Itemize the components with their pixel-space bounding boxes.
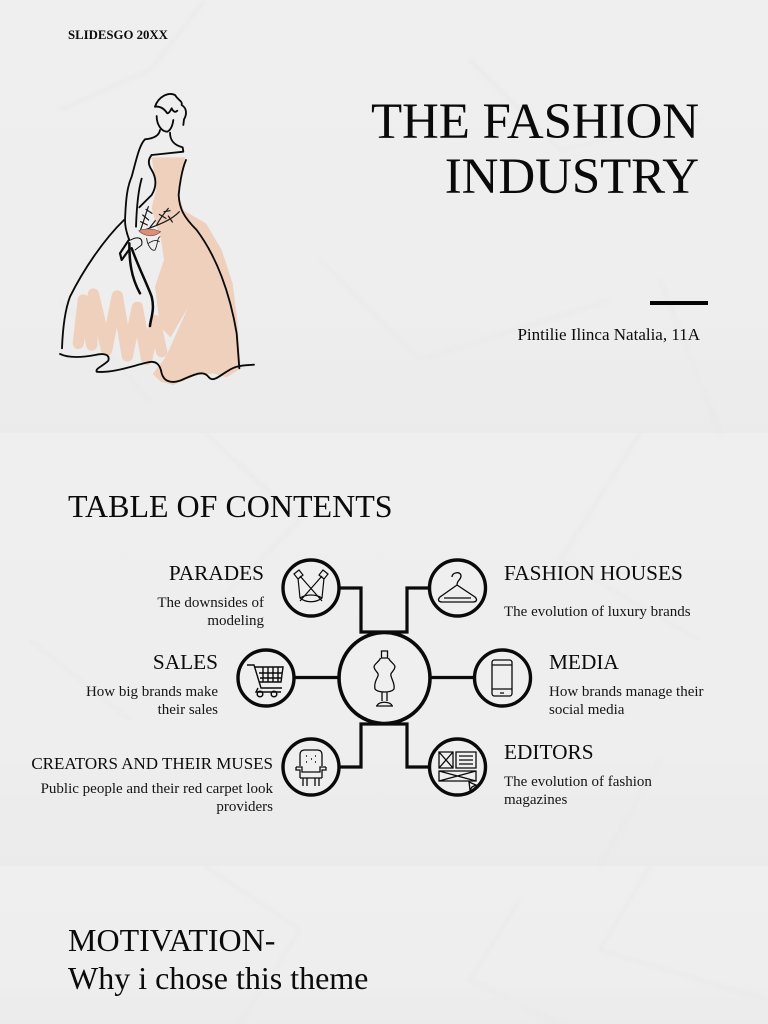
item: fashion houses: FASHION HOUSES (504, 561, 683, 585)
heading: motivation (68, 922, 368, 996)
icon: armchair (283, 739, 339, 795)
icon: spotlights (283, 560, 339, 616)
item: parades: The downsides of (157, 595, 264, 611)
item: sales: SALES (153, 650, 218, 674)
connectors (295, 588, 473, 767)
item: parades (157, 561, 264, 629)
bouquet (139, 207, 179, 250)
heading: motivation: MOTIVATION- (68, 922, 275, 958)
title (371, 94, 699, 205)
item: fashion houses (504, 561, 691, 620)
item: editors: magazines (504, 792, 567, 808)
figure outline (60, 94, 254, 382)
item: editors (504, 740, 652, 808)
item: creators and their muses: providers (216, 799, 273, 815)
item: parades: PARADES (169, 561, 264, 585)
item: media: How brands manage their (549, 684, 704, 700)
icon: magazine layout (430, 739, 486, 795)
item: creators and their muses (31, 754, 273, 815)
item: media (549, 650, 704, 718)
heading: motivation: Why i chose this theme (68, 960, 368, 996)
icon: shopping cart (238, 650, 294, 706)
icon: smartphone (474, 650, 530, 706)
item: editors: The evolution of fashion (504, 774, 652, 790)
title: INDUSTRY (445, 149, 699, 205)
dress colour wash (78, 157, 241, 385)
heading: table of contents: TABLE OF CONTENTS (68, 488, 393, 524)
title: THE FASHION (371, 94, 699, 150)
item: creators and their muses: CREATORS AND THEIR MUSES (31, 754, 273, 773)
hub circle with mannequin icon (339, 632, 430, 724)
item: fashion houses: The evolution of luxury brands (504, 604, 691, 620)
item: parades: modeling (207, 613, 264, 629)
icon: hanger (430, 560, 486, 616)
header label: SLIDESGO 20XX (68, 28, 168, 42)
illustration: woman in peach gown (59, 93, 255, 385)
item: editors: EDITORS (504, 740, 594, 764)
item: sales (86, 650, 218, 718)
item: sales: How big brands make (86, 684, 218, 700)
author: Pintilie Ilinca Natalia, 11A (517, 325, 700, 344)
accent bar (650, 301, 708, 305)
item: creators and their muses: Public people and their red carpet look (41, 781, 273, 797)
item: media: social media (549, 702, 624, 718)
item: sales: their sales (158, 702, 218, 718)
item: media: MEDIA (549, 650, 619, 674)
